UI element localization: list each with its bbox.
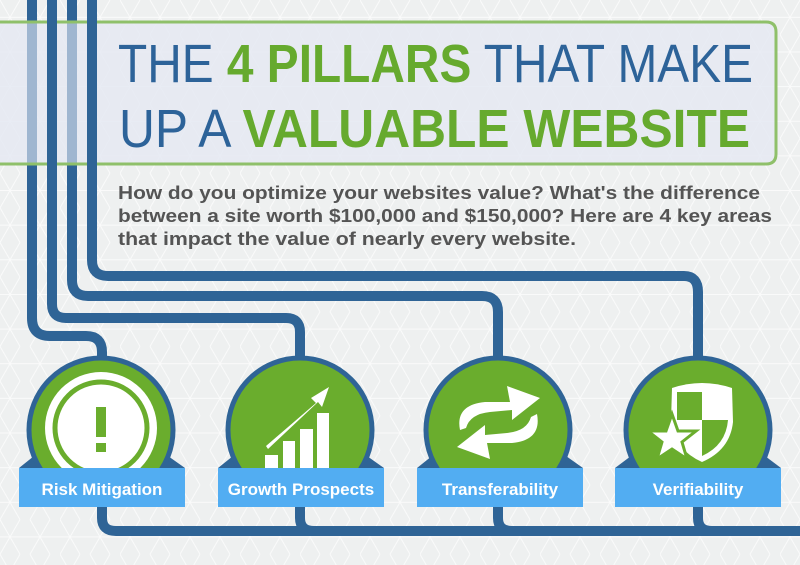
title banner [0, 20, 776, 166]
pillar: Transferability [417, 358, 583, 507]
pillar: Growth Prospects: Growth Prospects [228, 480, 374, 499]
intro paragraph: How do you optimize your websites value? What's the difference [118, 182, 760, 203]
intro paragraph [118, 182, 772, 249]
pillar: Risk Mitigation [19, 358, 185, 507]
pillar: Growth Prospects [218, 358, 384, 507]
title text: UP A VALUABLE WEBSITE [119, 99, 750, 159]
icon: growth chart [265, 387, 329, 470]
pillar: Verifiability: Verifiability [653, 480, 744, 499]
icon: warning [45, 372, 157, 484]
intro paragraph: that impact the value of nearly every website. [118, 228, 576, 249]
pillar: Risk Mitigation: Risk Mitigation [42, 480, 162, 499]
pillar: Transferability: Transferability [442, 480, 559, 499]
intro paragraph: between a site worth $100,000 and $150,000? Here are 4 key areas [118, 205, 772, 226]
title text [118, 34, 753, 159]
icon: exchange arrows [457, 386, 540, 459]
icon: shield with star [648, 383, 733, 462]
title text: THE 4 PILLARS THAT MAKE [118, 34, 753, 94]
pillar: Verifiability [615, 358, 781, 507]
